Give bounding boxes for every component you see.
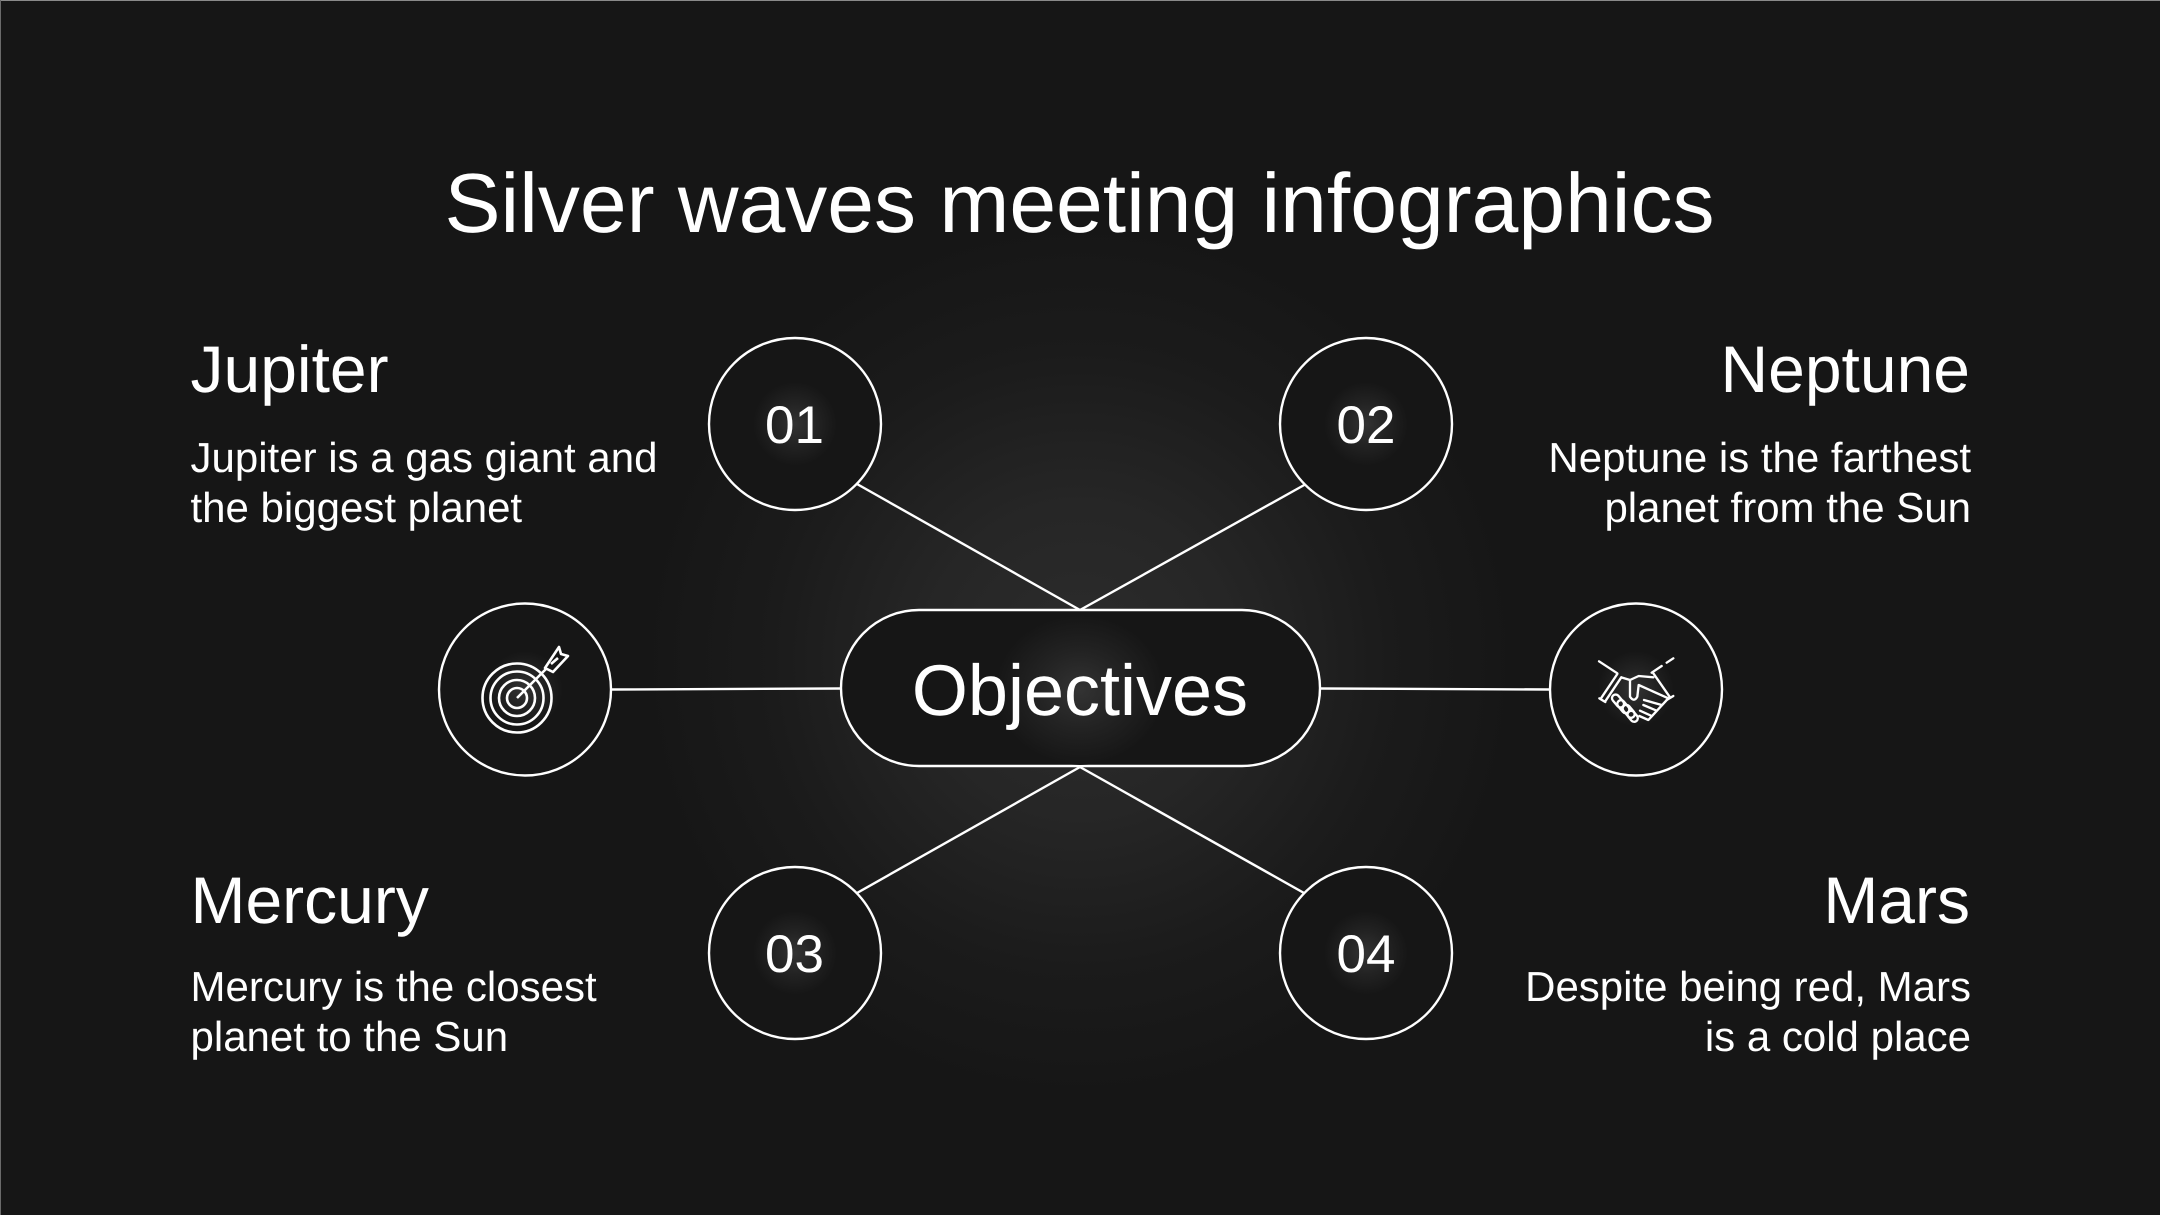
icon: handshake bbox=[1550, 604, 1722, 776]
text block: Jupiter bbox=[190, 332, 657, 531]
text block: Mars: Despite being red, Mars bbox=[1525, 963, 1971, 1010]
text block: Mercury: planet to the Sun bbox=[190, 1013, 508, 1060]
central pill: Objectives bbox=[841, 610, 1320, 766]
connector lines bbox=[611, 484, 1550, 893]
number circle 02: 02 bbox=[1337, 396, 1395, 455]
text block: Jupiter: Jupiter bbox=[190, 332, 389, 406]
text block: Neptune: planet from the Sun bbox=[1604, 484, 1971, 531]
text block: Neptune: Neptune is the farthest bbox=[1548, 434, 1971, 481]
text block: Jupiter: Jupiter is a gas giant and bbox=[190, 434, 657, 481]
text block: Mars: is a cold place bbox=[1705, 1013, 1971, 1060]
text block: Neptune: Neptune bbox=[1720, 332, 1970, 406]
text block: Mercury: Mercury is the closest bbox=[190, 963, 597, 1010]
text block: Mercury bbox=[190, 863, 597, 1060]
text block: Mercury: Mercury bbox=[190, 863, 429, 937]
number circle 01: 01 bbox=[765, 396, 824, 455]
text block: Jupiter: the biggest planet bbox=[190, 484, 522, 531]
number circle 03: 03 bbox=[765, 925, 824, 984]
number circle 04 bbox=[1280, 867, 1452, 1039]
icon: target with arrow bbox=[439, 604, 611, 776]
number circle 03 bbox=[709, 867, 881, 1039]
number circle 04: 04 bbox=[1337, 925, 1395, 984]
text block: Mars: Mars bbox=[1823, 863, 1970, 937]
text block: Mars bbox=[1525, 863, 1971, 1060]
title: Silver waves meeting infographics bbox=[445, 156, 1714, 250]
central pill: Objectives: Objectives bbox=[912, 651, 1248, 731]
number circle 01 bbox=[709, 338, 881, 510]
text block: Neptune bbox=[1548, 332, 1971, 531]
number circle 02 bbox=[1280, 338, 1452, 510]
